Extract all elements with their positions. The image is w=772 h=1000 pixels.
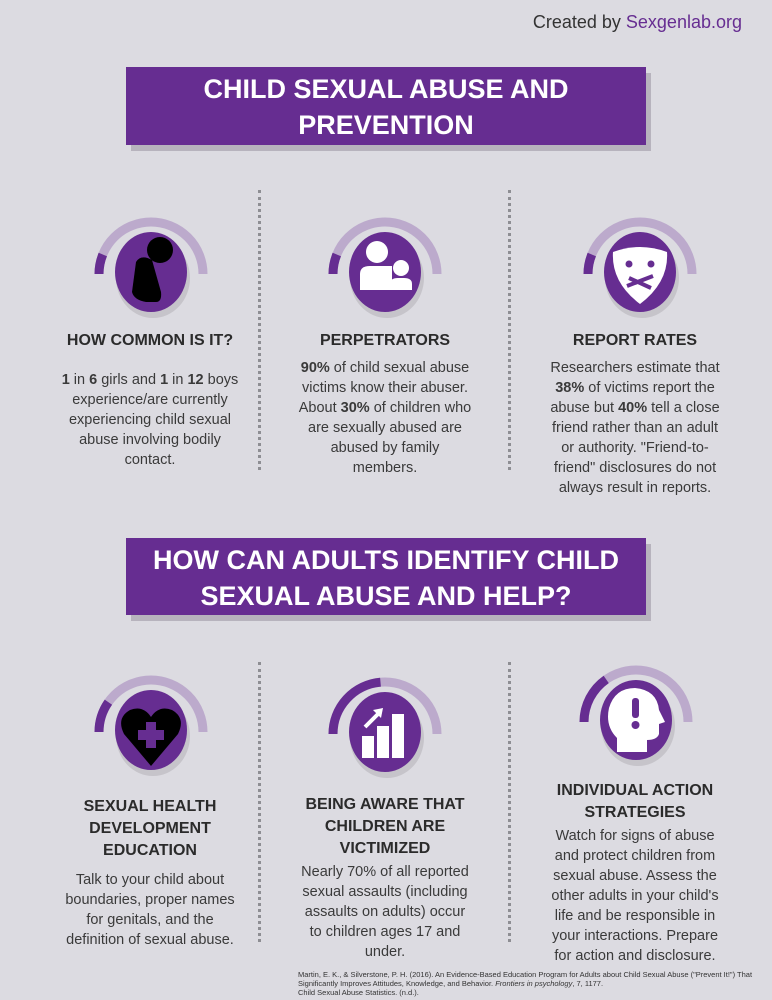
text: perpetrators: victims know their abuser. <box>302 380 468 396</box>
text: individual action: life and be responsible in <box>555 908 715 924</box>
icon: child <box>94 218 208 318</box>
second banner: HOW CAN ADULTS IDENTIFY CHILD <box>153 545 619 575</box>
heading: individual action: STRATEGIES <box>584 804 686 821</box>
text: sexual health education: Talk to your child about <box>76 872 224 888</box>
heading: how common: HOW COMMON IS IT? <box>67 332 233 349</box>
citation: Martin, E. K., & Silverstone, P. H. (2016). An Evidence-Based Education Program for Adults about Child Sexual Abuse ("Prevent It!") That Significantly Improves Attitudes, Knowledge, and Behavior. Frontiers in psychology, 7, 1177. <box>298 970 752 988</box>
heading: being aware: VICTIMIZED <box>340 840 430 857</box>
text: being aware: to children ages 17 and <box>310 924 460 940</box>
text: sexual health education: for genitals, and the <box>86 912 214 928</box>
text: individual action: sexual abuse. Assess the <box>553 868 717 884</box>
heading: sexual health education <box>84 798 216 859</box>
text: perpetrators: are sexually abused are <box>308 420 462 436</box>
text: individual action: other adults in your child's <box>551 888 719 904</box>
text: individual action: and protect children from <box>555 848 715 864</box>
text: how common: contact. <box>125 452 175 468</box>
heading: sexual health education: DEVELOPMENT <box>89 820 211 837</box>
text: report rates <box>550 360 720 496</box>
text: individual action: Watch for signs of abuse <box>555 828 715 844</box>
title banner: CHILD SEXUAL ABUSE AND <box>203 74 569 104</box>
text: report rates: 38% of victims report the <box>555 380 715 396</box>
icon: chart <box>328 678 442 778</box>
heading: sexual health education: EDUCATION <box>103 842 197 859</box>
text: being aware: Nearly 70% of all reported <box>301 864 469 880</box>
icon: silenced face <box>584 218 696 318</box>
text: how common: abuse involving bodily <box>79 432 221 448</box>
text: sexual health education: definition of sexual abuse. <box>66 932 234 948</box>
credit: Created by Sexgenlab.org <box>533 12 742 32</box>
citation <box>298 970 752 997</box>
title banner <box>126 67 646 145</box>
second banner: SEXUAL ABUSE AND HELP? <box>200 581 572 611</box>
text: sexual health education <box>65 872 235 948</box>
text: how common: experience/are currently <box>72 392 228 408</box>
text: being aware <box>301 864 469 960</box>
text: how common <box>62 372 238 468</box>
text: being aware: under. <box>365 944 405 960</box>
heading: individual action <box>557 782 713 821</box>
second banner <box>126 538 646 615</box>
text: individual action: your interactions. Prepare <box>552 928 718 944</box>
text: report rates: friend rather than an adult <box>552 420 718 436</box>
text: report rates: Researchers estimate that <box>550 360 720 376</box>
heading: perpetrators: PERPETRATORS <box>320 332 450 349</box>
text: perpetrators: abused by family <box>331 440 439 456</box>
text: perpetrators: members. <box>353 460 417 476</box>
text: perpetrators: About 30% of children who <box>299 400 471 416</box>
heading: report rates: REPORT RATES <box>573 332 697 349</box>
text: sexual health education: boundaries, proper names <box>65 892 235 908</box>
text: how common: 1 in 6 girls and 1 in 12 boys <box>62 372 238 388</box>
text: how common: experiencing child sexual <box>69 412 231 428</box>
heading: sexual health education: SEXUAL HEALTH <box>84 798 216 815</box>
text: report rates: always result in reports. <box>559 480 711 496</box>
icon: head with exclamation <box>580 666 692 766</box>
text: being aware: assaults on adults) occur <box>305 904 465 920</box>
text: perpetrators <box>298 360 471 476</box>
text: individual action <box>551 828 719 964</box>
title banner: PREVENTION <box>298 110 474 140</box>
citation: Child Sexual Abuse Statistics. (n.d.). <box>298 988 419 997</box>
text: perpetrators: 90% of child sexual abuse <box>301 360 469 376</box>
text: report rates: or authority. "Friend-to- <box>561 440 709 456</box>
heading: being aware: CHILDREN ARE <box>325 818 445 835</box>
text: being aware: sexual assaults (including <box>302 884 468 900</box>
heading: individual action: INDIVIDUAL ACTION <box>557 782 713 799</box>
text: report rates: friend" disclosures do not <box>554 460 716 476</box>
icon: heart <box>94 676 208 776</box>
text: individual action: for action and disclosure. <box>554 948 716 964</box>
text: report rates: abuse but 40% tell a close <box>550 400 720 416</box>
icon: perpetrators <box>328 218 442 318</box>
heading: being aware <box>305 796 465 857</box>
heading: being aware: BEING AWARE THAT <box>305 796 465 813</box>
